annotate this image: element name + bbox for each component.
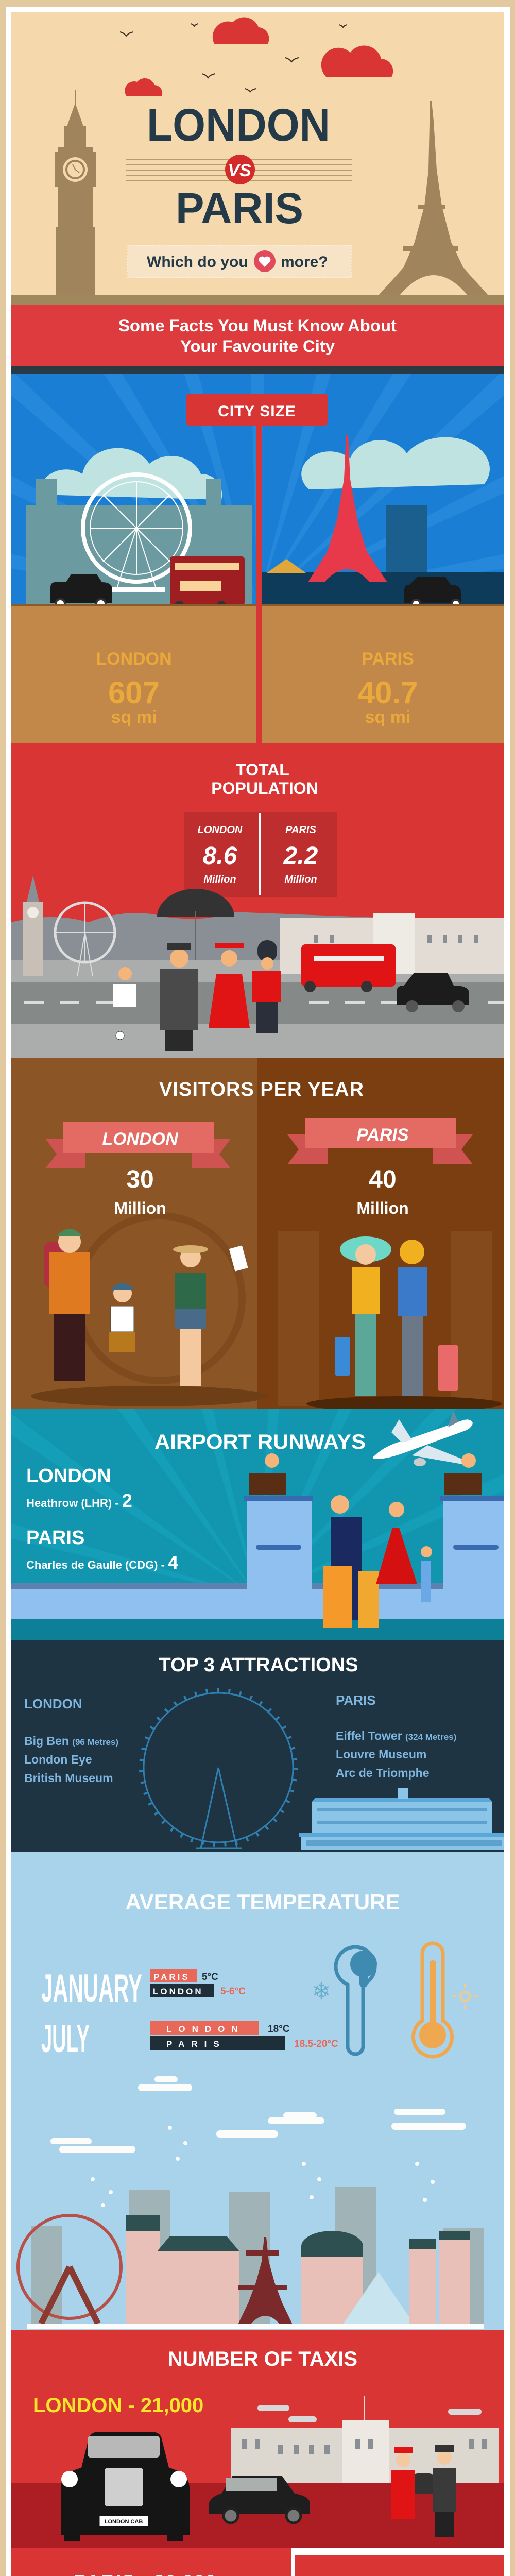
- ribbon: paris: PARIS: [356, 1125, 409, 1145]
- text: runway stats: Heathrow (LHR) - 2: [26, 1490, 132, 1511]
- chart: temperature bars: LONDON: [166, 2024, 245, 2034]
- chart: temperature bars: PARIS: [153, 1972, 190, 1982]
- chart: temperature bars: [150, 1969, 338, 2050]
- list: paris attractions: PARIS: [336, 1692, 376, 1708]
- icon: Big Ben: [55, 90, 96, 295]
- stat: paris size: sq mi: [365, 707, 410, 727]
- panel: airport runways: [11, 1409, 504, 1640]
- label: city size: CITY SIZE: [218, 403, 296, 420]
- tagline: which do you love more: Which do you: [147, 253, 248, 270]
- panel: number of taxis: NUMBER OF TAXIS: [168, 2348, 357, 2370]
- stat: paris size: [358, 649, 418, 727]
- icon: cold thermometer: [312, 1947, 377, 2054]
- london skyline: [26, 448, 252, 610]
- list: paris attractions: Louvre Museum: [336, 1748, 426, 1761]
- stat: visitors: [114, 1166, 409, 1217]
- heading: TOTAL: [236, 760, 289, 779]
- ribbon: london: [45, 1122, 231, 1168]
- chart: temperature bars: LONDON: [153, 1987, 203, 1996]
- ribbon: london: LONDON: [102, 1129, 179, 1149]
- list: london attractions: [24, 1696, 118, 1785]
- illustration: london street: [11, 876, 504, 1058]
- stat: visitors: Million: [114, 1199, 166, 1217]
- text: runway stats: LONDON: [26, 1465, 111, 1487]
- white frame: [11, 2548, 504, 2576]
- panel: total population: [11, 743, 504, 1058]
- title: LONDON vs PARIS: PARIS: [176, 184, 303, 232]
- stat: london size: sq mi: [111, 707, 157, 727]
- icon: hot thermometer: [413, 1943, 478, 2057]
- text: runway stats: PARIS: [26, 1527, 84, 1549]
- text: months: JANUARY: [41, 1967, 142, 2010]
- panel: visitors per year: [11, 1058, 504, 1412]
- stat: visitors: Million: [356, 1199, 409, 1217]
- icon: louvre building: [299, 1788, 504, 1850]
- panel: city size: [11, 374, 504, 743]
- title: LONDON vs PARIS: [126, 99, 352, 232]
- stat: paris size: PARIS: [362, 649, 414, 669]
- icon: london eye outline: [141, 1690, 296, 1848]
- title: LONDON vs PARIS: VS: [228, 161, 251, 180]
- list: london attractions: Big Ben (96 Metres): [24, 1734, 118, 1748]
- panel: top 3 attractions: TOP 3 ATTRACTIONS: [159, 1654, 358, 1676]
- tagline: which do you love more: [128, 245, 351, 278]
- stat box: PARIS: [285, 824, 316, 836]
- list: paris attractions: Arc de Triomphe: [336, 1766, 429, 1780]
- icon: birds: [120, 24, 347, 92]
- stat box: Million: [284, 874, 317, 885]
- banner: some facts: Some Facts You Must Know About: [118, 316, 397, 335]
- list: london attractions: British Museum: [24, 1771, 113, 1785]
- paris skyline: [262, 435, 504, 608]
- stat box: Million: [203, 874, 236, 885]
- list: paris attractions: [336, 1692, 456, 1780]
- text: months: [41, 1967, 142, 2061]
- chart: temperature bars: 5°C: [202, 1972, 218, 1982]
- chart: temperature bars: PARIS: [166, 2039, 226, 2049]
- text: runway stats: Charles de Gaulle (CDG) - 4: [26, 1552, 178, 1573]
- illustration: snowy paris: [18, 2076, 484, 2329]
- icon: cold thermometer: ❄: [312, 1979, 331, 2004]
- illustration: check-in counter: [11, 1453, 504, 1640]
- chart: temperature bars: 5-6°C: [220, 1986, 246, 1997]
- label: city size: [186, 394, 328, 426]
- header panel: [11, 12, 504, 305]
- stat: visitors: 40: [369, 1166, 397, 1193]
- stat box: [184, 812, 337, 897]
- title: LONDON vs PARIS: LONDON: [147, 99, 330, 150]
- stat box: 2.2: [283, 842, 318, 870]
- illustration: london cab scene: LONDON CAB: [105, 2519, 143, 2525]
- panel: number of taxis: [11, 2330, 504, 2576]
- panel: top 3 attractions: [11, 1640, 504, 1852]
- stat: london taxis: LONDON - 21,000: [33, 2394, 203, 2417]
- stat: paris size: 40.7: [358, 675, 418, 710]
- icon: red clouds: [125, 18, 393, 96]
- stat box: LONDON: [198, 824, 243, 836]
- stat: london size: LONDON: [96, 649, 172, 669]
- heading: [211, 760, 318, 798]
- stat box: 8.6: [203, 842, 237, 870]
- icon: plane: [373, 1411, 473, 1466]
- stat: london size: [96, 649, 172, 727]
- list: paris attractions: Eiffel Tower (324 Metres): [336, 1729, 456, 1742]
- chart: temperature bars: 18.5-20°C: [294, 2039, 338, 2049]
- panel: visitors per year: VISITORS PER YEAR: [159, 1079, 364, 1100]
- heading: POPULATION: [211, 779, 318, 798]
- banner: some facts: Your Favourite City: [180, 337, 335, 355]
- text: runway stats: [26, 1465, 178, 1573]
- panel: average temperature: AVERAGE TEMPERATURE: [126, 1890, 400, 1914]
- list: london attractions: LONDON: [24, 1696, 82, 1711]
- tagline: which do you love more: more?: [281, 253, 328, 270]
- banner: some facts: [11, 305, 504, 374]
- panel: airport runways: AIRPORT RUNWAYS: [154, 1431, 366, 1453]
- icon: Eiffel tower: [379, 101, 488, 295]
- panel: average temperature: [11, 1852, 504, 2330]
- list: london attractions: London Eye: [24, 1753, 92, 1766]
- illustration: london cab scene: [11, 2396, 504, 2548]
- illustration: tourists: [31, 1229, 502, 1412]
- stat: visitors: 30: [126, 1166, 154, 1193]
- text: months: JULY: [41, 2017, 90, 2061]
- ribbon: paris: [287, 1118, 473, 1164]
- stat: london size: 607: [108, 675, 160, 710]
- chart: temperature bars: 18°C: [268, 2024, 290, 2035]
